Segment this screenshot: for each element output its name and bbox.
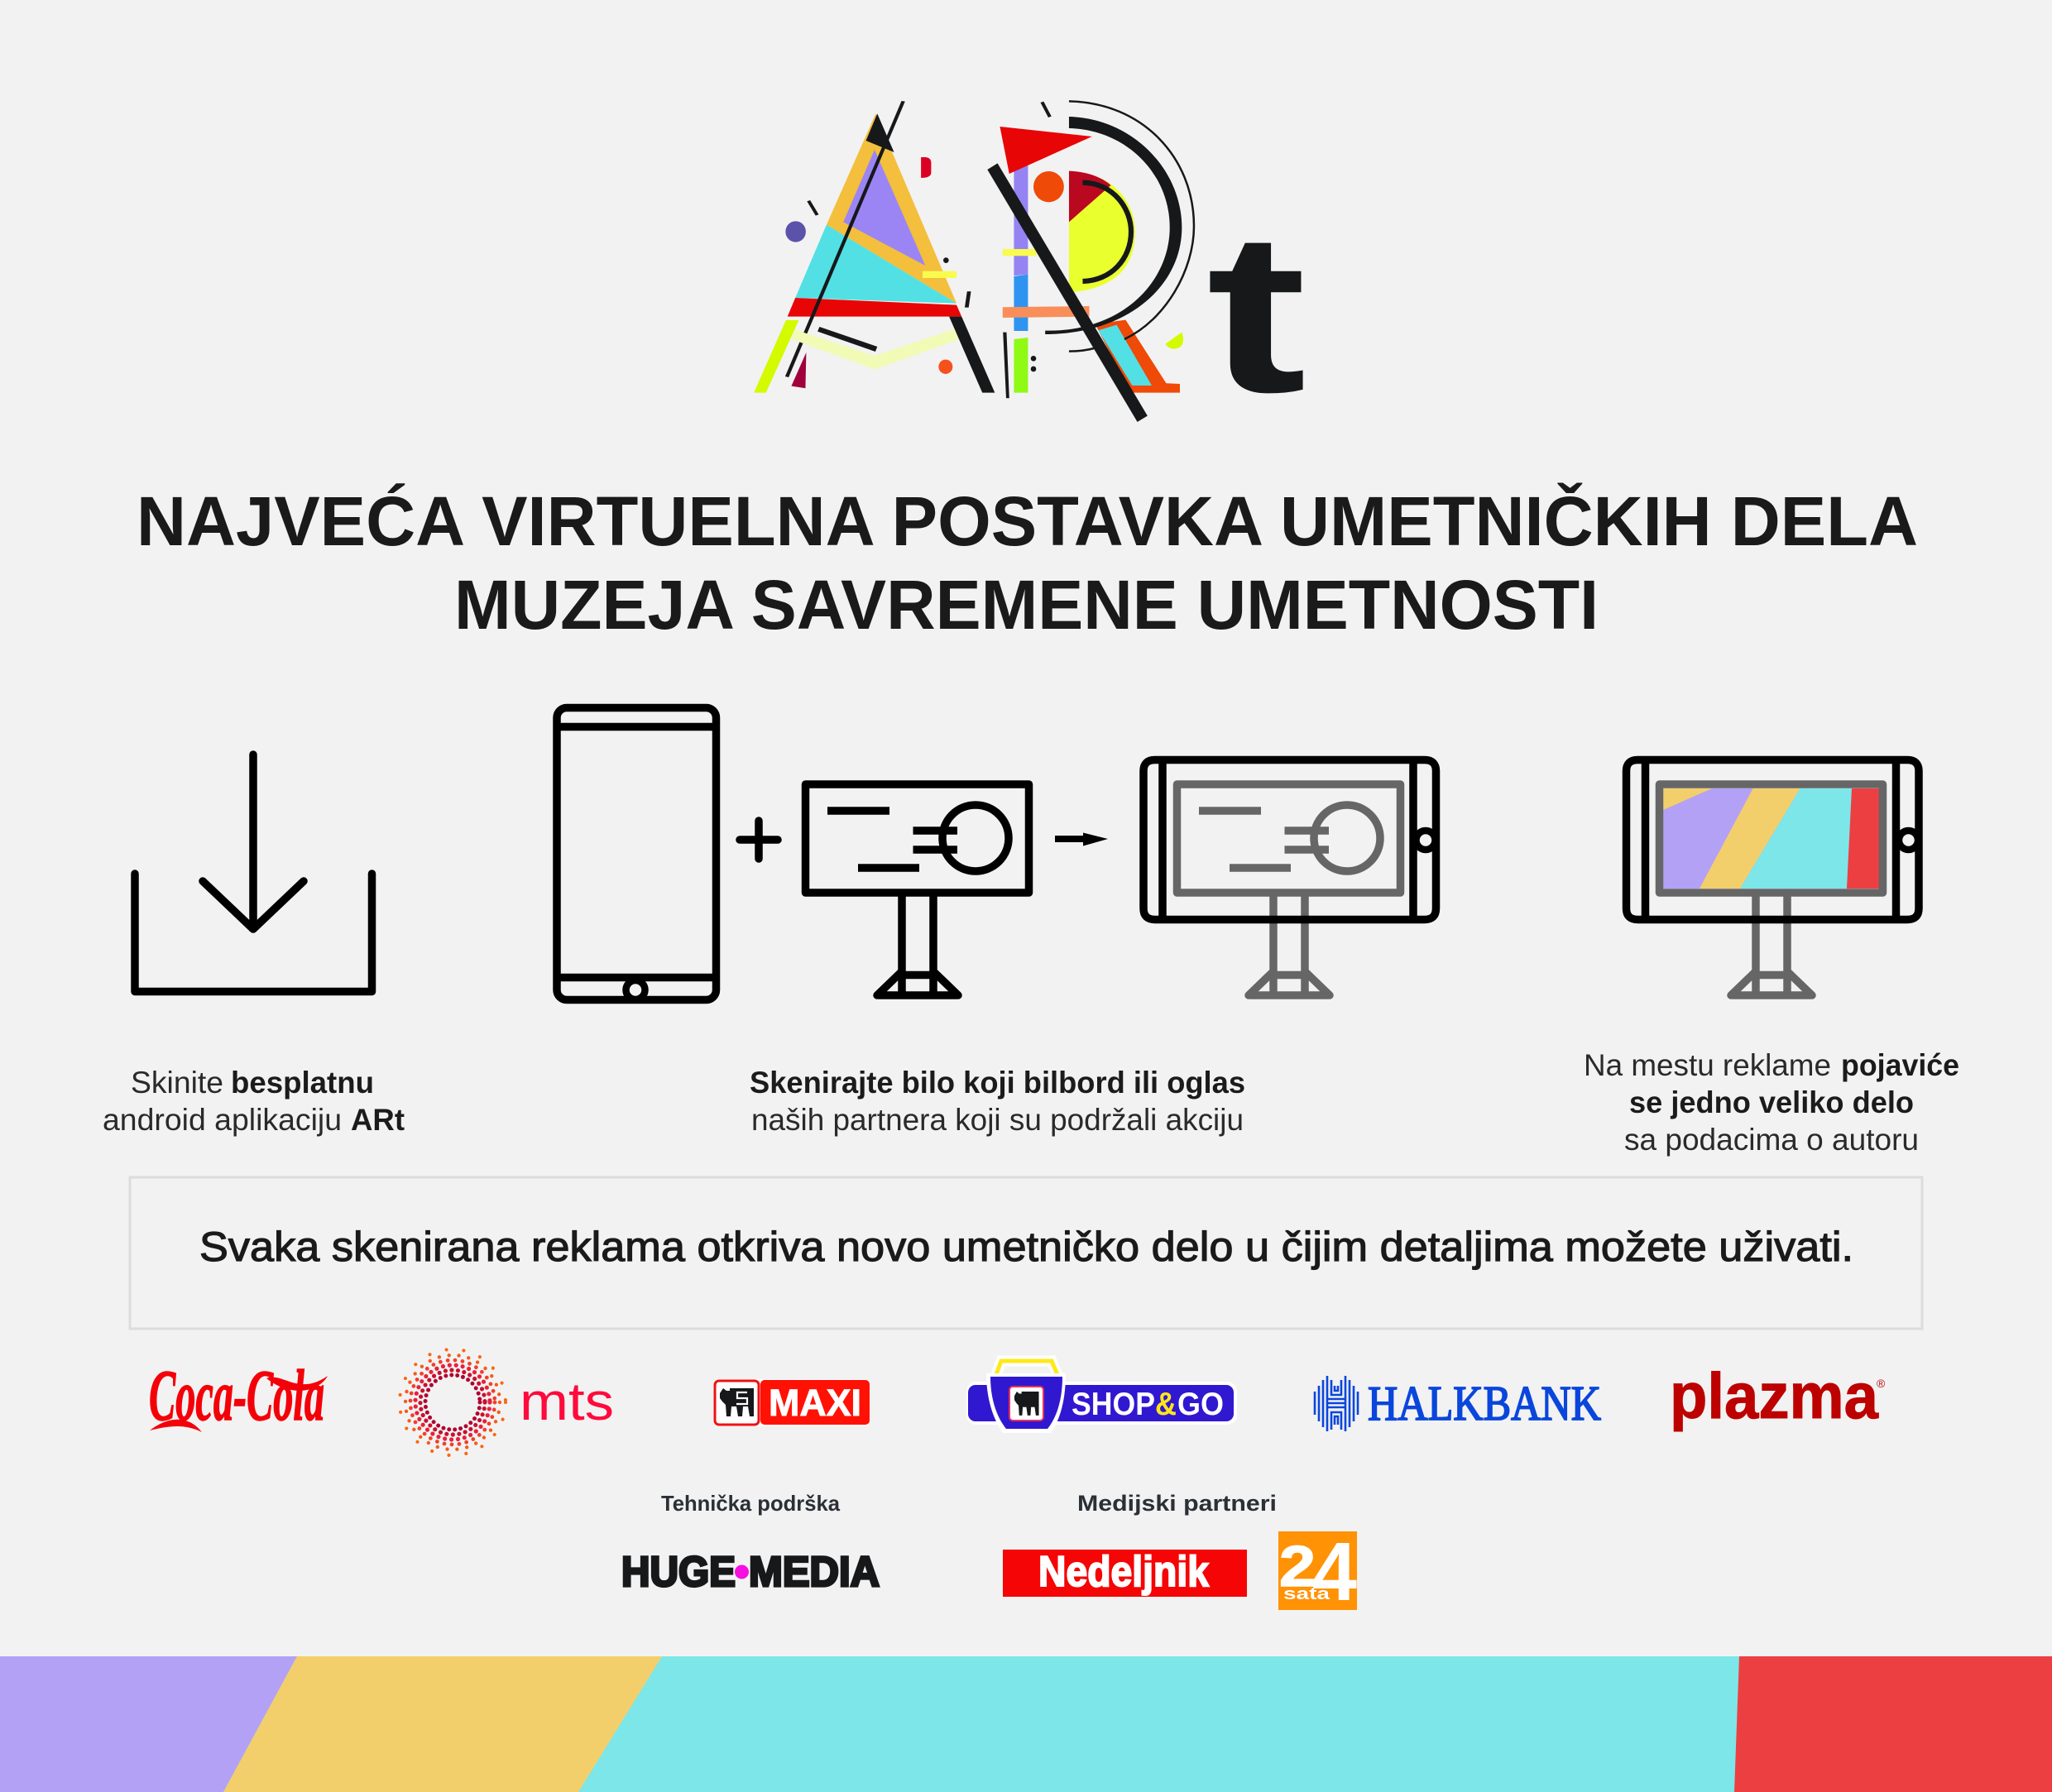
logo: Halkbank — [1315, 1376, 1601, 1431]
logo: Huge Media: MEDIA — [749, 1548, 880, 1595]
landscape phone frame — [1143, 759, 1436, 920]
icon: phone — [557, 708, 717, 999]
bottom colour band — [0, 1656, 2052, 1792]
heading: media partners: Medijski partneri — [1077, 1491, 1277, 1516]
logo: Shop&Go: & — [1155, 1387, 1177, 1422]
callout box: Svaka skenirana reklama otkriva novo umetničko delo u čijim detaljima možete uživati. — [199, 1224, 1853, 1270]
callout box — [130, 1177, 1922, 1329]
gray billboard outline — [1660, 784, 1883, 995]
text: step 2: Skenirajte bilo koji bilbord ili oglas — [750, 1066, 1245, 1100]
icon: plus — [740, 821, 778, 859]
arrow — [1055, 832, 1108, 846]
logo: Coca-Cola: Coca-Cola — [149, 1356, 324, 1436]
logo: 24 sata — [1278, 1526, 1357, 1618]
Halkbank emblem — [1315, 1376, 1358, 1431]
title — [137, 482, 1918, 644]
mts dotted ring — [400, 1349, 506, 1455]
logo: Shop&Go — [966, 1361, 1237, 1433]
icon: phone showing artwork on billboard — [1627, 759, 1919, 995]
logo: Huge Media: HUGE — [621, 1548, 736, 1595]
gray billboard on phone screen — [1177, 784, 1400, 995]
logo: Coca-Cola — [149, 1356, 328, 1436]
logo: plazma: ® — [1877, 1377, 1886, 1390]
logo letter A and R artwork — [754, 101, 1194, 422]
logo: ARt — [754, 101, 1306, 440]
text: step 2: naših partnera koji su podržali akciju — [751, 1103, 1244, 1137]
text: step 1: besplatnu — [231, 1066, 374, 1100]
logo: Nedeljnik: Nedeljnik — [1038, 1548, 1209, 1596]
text: step 3 — [1584, 1048, 1959, 1157]
icon: phone scanning billboard — [1143, 759, 1436, 995]
landscape phone frame — [1627, 759, 1919, 920]
mts wordmark: mts — [520, 1372, 614, 1431]
text: step 3: sa podacima o autoru — [1624, 1123, 1919, 1157]
icon: download to tray — [135, 755, 372, 991]
title: NAJVEĆA VIRTUELNA POSTAVKA UMETNIČKIH DELA — [137, 482, 1918, 560]
logo: mts — [400, 1349, 614, 1455]
logo: Shop&Go: GO — [1177, 1387, 1224, 1422]
Halkbank wordmark: HALKBANK — [1368, 1376, 1601, 1430]
logo: 24 sata: sata — [1283, 1585, 1330, 1603]
logo: MAXI: MAXI — [769, 1382, 861, 1424]
icon: billboard — [806, 784, 1029, 995]
artwork in billboard — [1663, 788, 1879, 889]
logo: 24 sata: 2 — [1279, 1534, 1316, 1598]
heading: technical support: Tehnička podrška — [661, 1491, 841, 1516]
text: step 3: pojaviće — [1841, 1048, 1959, 1082]
logo: MAXI — [713, 1379, 870, 1426]
text: step 1 — [103, 1066, 405, 1137]
logo: Huge Media — [621, 1548, 880, 1595]
title: MUZEJA SAVREMENE UMETNOSTI — [454, 566, 1599, 644]
text: step 1: ARt — [351, 1103, 405, 1137]
logo: 24 sata: 4 — [1312, 1526, 1357, 1618]
text: step 3: Na mestu reklame — [1584, 1048, 1831, 1082]
logo letter t: t — [1206, 186, 1306, 440]
text: step 1: Skinite — [131, 1066, 223, 1100]
text: step 2 — [750, 1066, 1245, 1137]
text: step 1: android aplikaciju — [103, 1103, 342, 1137]
text: step 3: se jedno veliko delo — [1629, 1085, 1914, 1119]
logo: plazma: plazma — [1670, 1359, 1879, 1432]
logo: Shop&Go: SHOP — [1072, 1387, 1155, 1422]
